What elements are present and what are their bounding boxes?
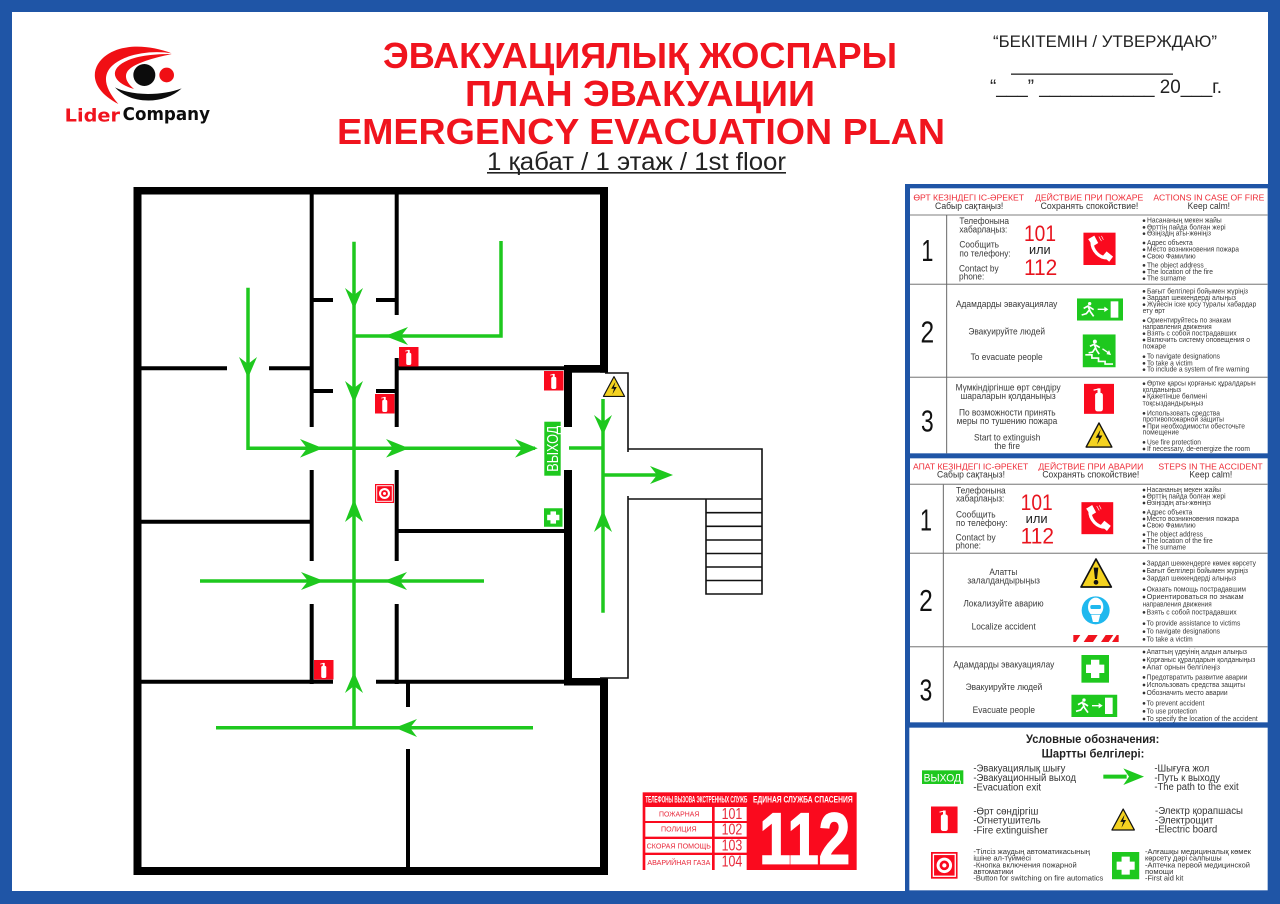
icon: extinguisher [1084,384,1114,414]
step 3 details: To use protection [1147,708,1197,715]
approval block: “БЕКІТЕМІН / УТВЕРЖДАЮ” [993,32,1217,51]
legend: exit path: -The path to the exit [1154,782,1239,793]
step 3 details: To specify the location of the accident [1147,716,1258,723]
step 2 details: To take a victim [1147,360,1193,367]
emergency phones board: 101 [722,806,742,823]
heading: accident actions [913,460,1263,480]
blue panel column backing [905,184,1280,904]
legend: exit path: -Путь к выходу [1154,773,1220,784]
step 1 instructions: 112 [1021,524,1054,549]
step 1 details: Өзіңіздің аты-жөніңіз [1147,499,1211,507]
step 2 instructions: Алатты [989,567,1017,577]
step 2 instructions: Адамдарды эвакуациялау [956,299,1058,309]
emergency phones board [643,792,857,879]
approval block: “___” ___________ 20___г. [990,77,1222,98]
step 3 details: Апат орнын белгілеңіз [1147,663,1220,671]
heading: accident actions: Сабыр сақтаңыз! [937,470,1005,480]
step 3 details: Обозначить место аварии [1147,689,1228,697]
legend: alarm button: -Тілсіз жаудың автоматикасының [973,847,1090,856]
step 1 instructions: phone: [959,272,984,282]
panel: steps in the accident [910,458,1268,723]
step 1 instructions: 112 [1024,255,1057,280]
icon: electric board on plan [603,377,625,396]
emergency phones board: 102 [722,822,742,839]
legend: electric board: -Электрощит [1155,815,1214,826]
step numbers: 1 [921,234,933,268]
emergency phones board: ПОЛИЦИЯ [661,825,697,834]
step 1 details: Адрес объекта [1147,508,1192,516]
legend: exit path: -Шығуға жол [1154,763,1209,774]
step 1 instructions: по телефону: [956,518,1008,528]
step numbers: 2 [920,315,934,349]
step 3 details: Предотвратить развитие аварии [1147,674,1247,681]
step 1 instructions [959,216,1057,282]
legend heading: Шартты белгілері: [1042,747,1144,760]
icon: fire alarm button on plan [375,484,394,503]
step 1 instructions: Телефонына [959,216,1009,226]
title block: ПЛАН ЭВАКУАЦИИ [465,73,815,114]
step 2 details: Взять с собой пострадавших [1147,608,1237,616]
heading: fire actions: Сабыр сақтаңыз! [935,201,1003,211]
legend: extinguisher: -Огнетушитель [973,816,1041,827]
heading: accident actions: АПАТ КЕЗІНДЕГІ ІС-ӘРЕКЕТ [913,461,1029,471]
step 2 details: Зардап шеккендерді алыңыз [1147,575,1236,583]
step 2 instructions: Локализуйте аварию [963,598,1044,608]
step 1 details: Место возникновения пожара [1147,247,1239,254]
step 3 details: If necessary, de-energize the room [1147,446,1250,453]
legend: electric board: -Electric board [1155,825,1217,836]
step 1 instructions: Сообщить [956,509,996,519]
heading: accident actions: STEPS IN THE ACCIDENT [1158,461,1263,471]
step 2 instructions: Эвакуируйте людей [968,327,1045,337]
icon: hazard tape [1073,635,1119,642]
floor plan: walls [134,187,608,875]
logo: Lider Company: Lider [65,106,120,127]
heading: accident actions: ДЕЙСТВИЕ ПРИ АВАРИИ [1038,460,1143,471]
step 1 details: Насананың мекен жайы [1147,217,1222,225]
legend: electric board: -Электр қорапшасы [1155,806,1243,817]
stairwell outline [600,373,762,678]
step numbers: 1 [920,503,932,537]
step 3 instructions: Мүмкіндіргінше өрт сөндіру [956,382,1061,392]
step 2 details [1143,561,1256,643]
heading: accident actions: Keep calm! [1189,470,1232,480]
step numbers [919,503,933,708]
step 1 details: The surname [1147,276,1186,283]
icon: first aid [1081,655,1109,683]
icon: fire phone [1081,502,1113,534]
step 1 instructions: Телефонына [956,485,1006,495]
legend: alarm button: ішіне ал-түймесі [973,854,1031,863]
step 1 instructions [956,485,1054,551]
step 1 details: Адрес объекта [1147,239,1193,247]
heading: fire actions: Сохранять спокойствие! [1041,201,1138,211]
emergency phones board: ТЕЛЕФОНЫ ВЫЗОВА ЭКСТРЕННЫХ СЛУЖБ [645,794,748,804]
step 1 details [1144,486,1239,552]
step 1 details: The object address [1147,532,1203,539]
step 2 details: направления движения [1143,324,1212,331]
step 2 details: пожаре [1143,343,1166,350]
panel: actions in case of fire [910,188,1268,453]
floor subtitle: 1 қабат / 1 этаж / 1st floor [487,148,786,176]
step 2 instructions [956,299,1058,362]
step 3 details: Use fire protection [1147,439,1201,446]
legend: first aid: -Алғашқы медициналық көмек [1145,847,1252,856]
step 1 details: The location of the fire [1147,269,1213,276]
step numbers: 3 [921,405,934,439]
heading: fire actions: Keep calm! [1188,201,1230,211]
step 3 instructions: меры по тушению пожара [957,416,1057,426]
logo: Lider Company [65,47,210,127]
legend: electric board [1112,806,1243,836]
step 2 details [1143,287,1256,374]
step 3 details: To prevent accident [1147,700,1204,707]
icon: exit sign [1071,695,1117,717]
heading: fire actions: ӨРТ КЕЗІНДЕГІ ІС-ӘРЕКЕТ [913,192,1025,202]
icon: fire extinguishers on plan [314,347,564,680]
step 2 details: Жүйесін іске қосу туралы хабардар [1147,301,1256,309]
approval block [990,32,1222,98]
step 1 instructions: Contact by [959,263,999,273]
step 2 details: направления движения [1143,602,1212,609]
step 3 instructions: шараларын қолданыңыз [961,391,1056,401]
step 2 instructions: Localize accident [972,622,1036,632]
icon: warning triangle [1081,559,1111,587]
step 2 details: To take a victim [1147,636,1193,643]
step 2 details: Бағыт белгілері бойымен жүріңіз [1147,287,1248,295]
icon: first aid on plan [544,508,562,527]
legend: exit: -Эвакуациялық шығу [973,763,1065,774]
step 1 instructions: или [1026,512,1048,526]
step 1 details: Насананың мекен жайы [1147,486,1221,494]
step 2 instructions: To evacuate people [971,352,1043,362]
step 2 details: Ориентируйтесь по знакам [1147,317,1231,325]
step 3 details: Өртке қарсы қорғаныс құралдарын [1147,381,1256,388]
emergency phones board: 112 [759,798,850,879]
heading: fire actions: ACTIONS IN CASE OF FIRE [1153,192,1265,202]
step 2 details: To provide assistance to victims [1147,621,1241,628]
step numbers: 2 [919,584,933,618]
evacuation route arrows [200,241,673,737]
legend: exit: -Evacuation exit [973,783,1041,794]
heading: fire actions: ДЕЙСТВИЕ ПРИ ПОЖАРЕ [1035,191,1144,202]
step 1 instructions: phone: [956,541,981,551]
icon: gas mask mandatory sign [1082,596,1110,624]
step 2 instructions: залалдандырыңыз [967,576,1040,586]
legend: exit path [1103,763,1239,793]
emergency phones board: 104 [722,854,743,871]
step 1 details: Свою Фамилию [1147,253,1196,260]
step 2 details: Взять с собой пострадавших [1147,330,1237,338]
step 3 instructions: Адамдарды эвакуациялау [953,659,1055,669]
heading: fire actions [913,191,1265,211]
heading: accident actions: Сохранять спокойствие! [1042,470,1139,480]
step 3 instructions: По возможности принять [959,408,1056,418]
title block [337,35,945,152]
step 2 details: Бағыт белгілері бойымен жүріңіз [1147,567,1248,575]
step 3 details: Апаттың үдеуінің алдын алыңыз [1147,648,1247,656]
legend: alarm button: -Кнопка включения пожарной [973,861,1077,870]
legend: extinguisher: -Өрт сөндіргіш [973,806,1038,817]
step 1 instructions: хабарлаңыз: [959,225,1007,235]
step numbers [920,234,934,439]
title block: EMERGENCY EVACUATION PLAN [337,111,945,152]
step 2 details: ету өрт [1143,308,1166,315]
step 3 details: тоқсыздандырыңыз [1143,401,1203,408]
step 1 instructions: или [1029,243,1051,257]
legend: first aid: көрсету дәрі салпышы [1145,854,1222,863]
legend: exit: -Эвакуационный выход [973,773,1076,784]
legend: alarm button: автоматики [973,867,1013,876]
step 2 details: Зардап шеккендерді алыңыз [1147,294,1236,302]
step 2 details: To navigate designations [1147,354,1220,361]
step 1 details [1144,217,1239,283]
step 2 details: Оказать помощь пострадавшим [1147,587,1246,594]
legend: exit: ВЫХОД [924,773,962,785]
step 3 details: қолданыңыз [1143,387,1181,394]
legend: first aid [1112,847,1252,883]
legend: first aid: помощи [1145,867,1173,876]
step 1 instructions: Сообщить [959,240,999,250]
emergency phones board: ПОЖАРНАЯ [659,810,699,819]
step 3 details: При необходимости обесточьте [1147,422,1245,430]
step 1 details: The object address [1147,262,1204,269]
step 3 details [1144,648,1258,723]
step 2 details: To navigate designations [1147,629,1220,636]
legend: first aid: -First aid kit [1145,874,1183,883]
step 3 instructions: Evacuate people [973,705,1035,715]
legend heading: Условные обозначения: [1026,733,1159,746]
legend: exit [922,763,1076,794]
step 2 details: To include a system of fire warning [1147,367,1249,374]
step 1 details: The surname [1147,545,1186,552]
icon: stairs exit sign [1083,334,1116,367]
logo: Lider Company: Company [123,105,210,125]
legend: extinguisher [931,806,1049,836]
legend heading [1026,733,1159,760]
emergency phones board: ЕДИНАЯ СЛУЖБА СПАСЕНИЯ [753,794,853,804]
step 3 instructions [956,382,1061,451]
step 1 instructions: по телефону: [959,248,1011,258]
step 3 instructions: the fire [994,441,1020,451]
exit sign on plan: ВЫХОД [545,425,562,472]
step numbers: 3 [920,674,932,708]
step 1 details: Место возникновения пожара [1147,516,1239,523]
icon: fire phone [1083,233,1116,265]
step 1 instructions: 101 [1024,221,1056,246]
legend: alarm button [931,847,1104,883]
step 1 details: Өрттің пайда болған жері [1147,223,1226,231]
step 1 instructions: 101 [1021,490,1053,515]
step 2 instructions [963,567,1044,632]
step 1 details: Өрттің пайда болған жері [1147,493,1226,501]
emergency phones board: АВАРИЙНАЯ ГАЗА [647,858,711,867]
step 3 details: противопожарной защиты [1143,416,1224,424]
legend: first aid: -Аптечка первой медицинской [1145,861,1250,870]
legend: alarm button: -Button for switching on fire automatics [973,874,1104,883]
step 2 details: Включить систему оповещения о [1147,337,1250,344]
step 3 details: Қажетінше бөлмені [1147,393,1207,401]
step 3 details: Использовать средства защиты [1147,682,1245,689]
step 3 details: помещение [1143,430,1179,437]
step 2 details: Зардап шеккендерге көмек көрсету [1147,561,1256,568]
step 3 details: Использовать средства [1147,410,1220,417]
step 1 instructions: хабарлаңыз: [956,494,1004,504]
icon: exit sign [1077,298,1123,321]
step 2 details: Ориентироваться по знакам [1147,594,1244,601]
emergency phones board: СКОРАЯ ПОМОЩЬ [647,841,711,850]
step 1 details: The location of the fire [1147,538,1213,545]
legend: extinguisher: -Fire extinguisher [973,825,1049,836]
step 3 instructions [953,659,1055,715]
step 3 details [1143,381,1256,453]
step 3 instructions: Start to extinguish [974,432,1040,442]
title block: ЭВАКУАЦИЯЛЫҚ ЖОСПАРЫ [383,35,897,76]
step 1 details: Свою Фамилию [1147,523,1196,530]
step 1 instructions: Contact by [956,532,996,542]
emergency phones board: 103 [722,838,742,855]
step 1 details: Өзіңіздің аты-жөніңіз [1147,230,1211,238]
panel: legend [909,728,1268,890]
icon: electric hazard [1086,423,1112,447]
step 3 instructions: Эвакуируйте людей [966,682,1042,692]
step 3 details: Қорғаныс құралдарын қолданыңыз [1147,657,1255,664]
